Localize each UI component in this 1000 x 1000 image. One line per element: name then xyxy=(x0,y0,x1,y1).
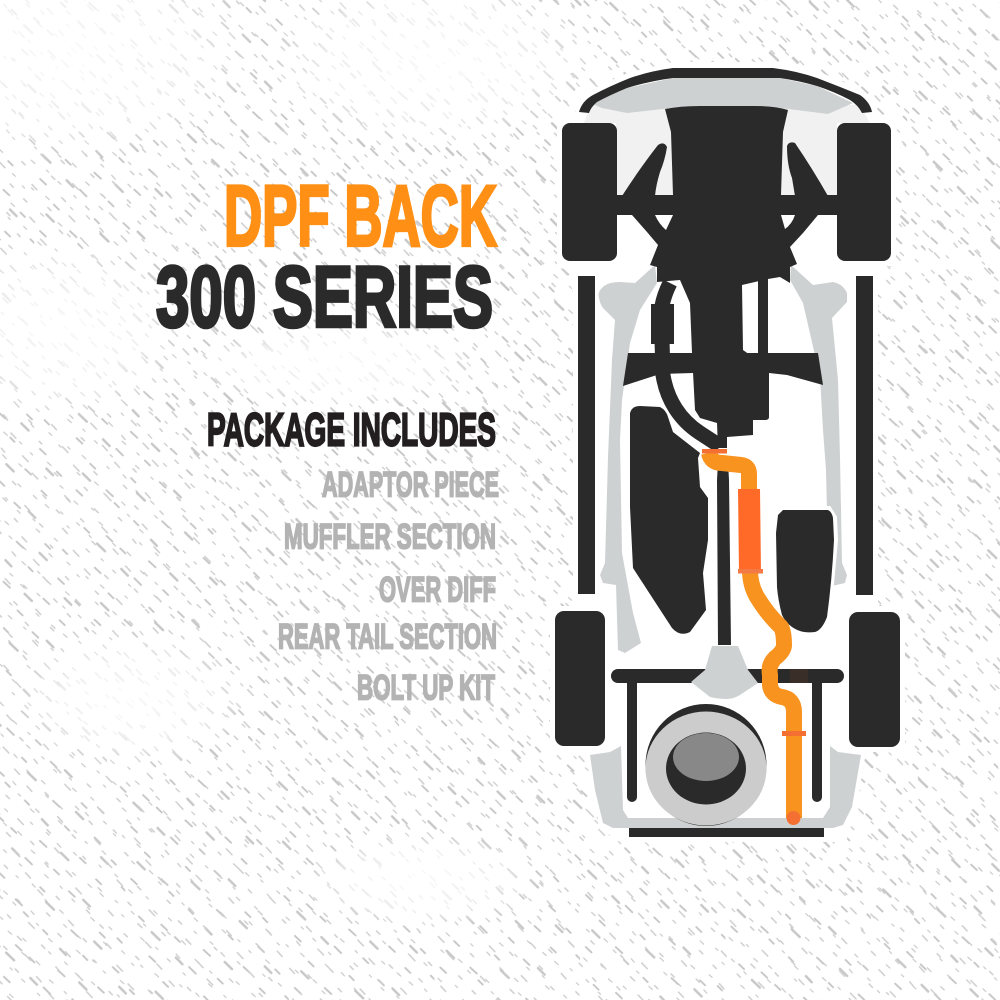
tire shadow xyxy=(646,704,766,826)
spare tire xyxy=(646,704,766,826)
car white silhouette xyxy=(550,62,905,842)
orange exhaust pipe xyxy=(709,453,794,818)
tire hole xyxy=(666,732,746,804)
left control arm xyxy=(622,143,667,196)
right seat white halo xyxy=(776,510,834,632)
right suspension arm gray xyxy=(790,265,847,586)
right control arm xyxy=(787,142,828,196)
light floor panel xyxy=(584,105,870,195)
rear right wheel xyxy=(849,612,900,747)
transmission strut xyxy=(758,278,768,358)
title: DPF BACK: DPF BACK xyxy=(224,168,497,264)
crossmember left xyxy=(623,353,693,386)
left rear link xyxy=(627,683,637,802)
right gap in suspension xyxy=(781,215,795,229)
driveshaft xyxy=(717,462,731,645)
item: adaptor piece: ADAPTOR PIECE xyxy=(322,466,499,504)
car underside diagram xyxy=(550,62,905,842)
left gap in suspension xyxy=(655,215,673,230)
left side rail xyxy=(578,276,595,594)
clamp: adaptor xyxy=(702,449,727,454)
muffler section xyxy=(738,489,761,573)
front right wheel xyxy=(837,123,891,261)
item: over diff: OVER DIFF xyxy=(379,570,496,610)
item: muffler section: MUFFLER SECTION xyxy=(284,518,496,556)
engine and transmission body xyxy=(617,106,837,448)
clamp: tail xyxy=(782,731,806,736)
right seat xyxy=(776,510,834,632)
front bumper black arc xyxy=(579,68,872,113)
exhaust tip xyxy=(786,811,800,825)
rear black bar xyxy=(629,828,824,837)
crossmember right xyxy=(742,353,823,385)
left seat xyxy=(630,406,708,634)
list: included items xyxy=(278,466,499,708)
rear cross bar xyxy=(611,669,844,683)
front bumper gray xyxy=(590,78,853,114)
right rear link xyxy=(812,683,822,802)
front exhaust pipe xyxy=(662,283,720,446)
tire ring xyxy=(646,712,766,826)
clamp: muffler xyxy=(738,569,763,574)
rear left wheel xyxy=(555,611,605,746)
left suspension arm gray xyxy=(598,265,657,653)
right side rail xyxy=(856,276,873,595)
front left wheel xyxy=(562,123,617,261)
hole highlight xyxy=(673,733,739,781)
front muffler block xyxy=(651,304,674,344)
heading: package includes: PACKAGE INCLUDES xyxy=(207,404,496,456)
rear bumper gray xyxy=(590,746,861,828)
differential xyxy=(691,646,758,699)
bar shadow patch xyxy=(790,669,808,683)
item: rear tail section: REAR TAIL SECTION xyxy=(278,618,497,656)
title: 300 SERIES: 300 SERIES xyxy=(156,250,493,346)
item: bolt up kit: BOLT UP KIT xyxy=(357,668,495,708)
